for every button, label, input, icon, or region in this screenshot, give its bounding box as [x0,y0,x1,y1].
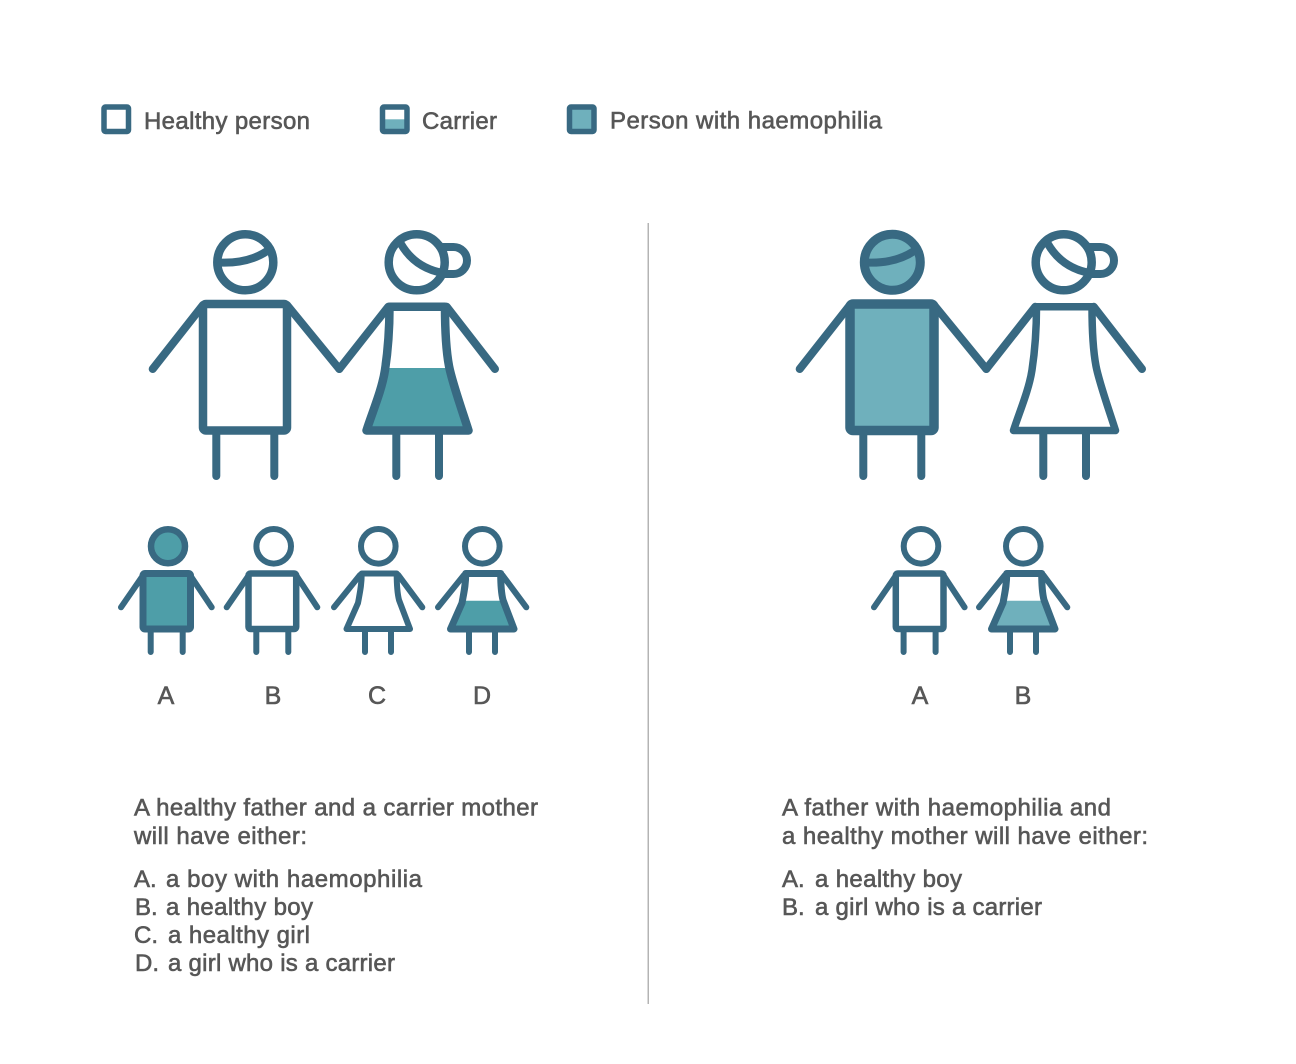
legend icon: person with haemophilia [570,107,594,132]
text block: right description: A. [782,866,805,893]
child B: healthy boy [227,529,317,652]
child A: healthy boy [874,529,965,652]
legend label: carrier: Carrier [422,108,497,135]
text block: left description: a healthy boy [166,894,313,921]
text block: left description: B. [135,894,158,921]
child labels: A [912,682,929,710]
panel: healthy father and carrier mother [121,234,538,977]
divider [648,223,649,1004]
text block: right description: a healthy boy [815,866,962,893]
child C: healthy girl [334,529,422,652]
child labels: A [158,682,175,710]
child D: carrier girl [438,529,526,652]
text block: left description: a girl who is a carrier [168,950,395,977]
text block: left description: a boy with haemophilia [166,866,423,893]
child labels: B [1015,682,1031,710]
child labels: C [368,682,386,710]
text block: right description: A father with haemophilia and [782,794,1111,822]
panel: father with haemophilia and healthy mother [782,234,1148,921]
child labels [912,682,1031,710]
legend [104,107,883,135]
child B: carrier girl [979,529,1067,652]
legend label: person with haemophilia: Person with haemophilia [610,108,883,134]
text block: left description: will have either: [133,823,307,850]
figure: healthy mother [986,234,1142,476]
text block: left description: A. [134,866,157,893]
figure: healthy father [153,234,339,476]
legend label: healthy person: Healthy person [144,108,310,135]
child labels: D [473,682,491,710]
text block: right description: B. [782,894,805,921]
text block: right description [782,794,1148,921]
text block: left description: A healthy father and a carrier mother [134,794,538,822]
child A: boy with haemophilia [121,529,212,652]
legend icon: carrier [382,107,407,132]
text block: left description [133,794,538,977]
child labels [158,682,491,710]
text block: left description: C. [134,922,158,949]
legend icon: healthy person [104,107,128,132]
text block: left description: D. [135,950,159,977]
text block: left description: a healthy girl [168,922,310,949]
figure: carrier mother [339,234,495,476]
child labels: B [265,682,281,710]
text block: right description: a healthy mother will have either: [782,823,1148,850]
text block: right description: a girl who is a carrier [815,894,1042,921]
figure: father with haemophilia [800,234,986,476]
